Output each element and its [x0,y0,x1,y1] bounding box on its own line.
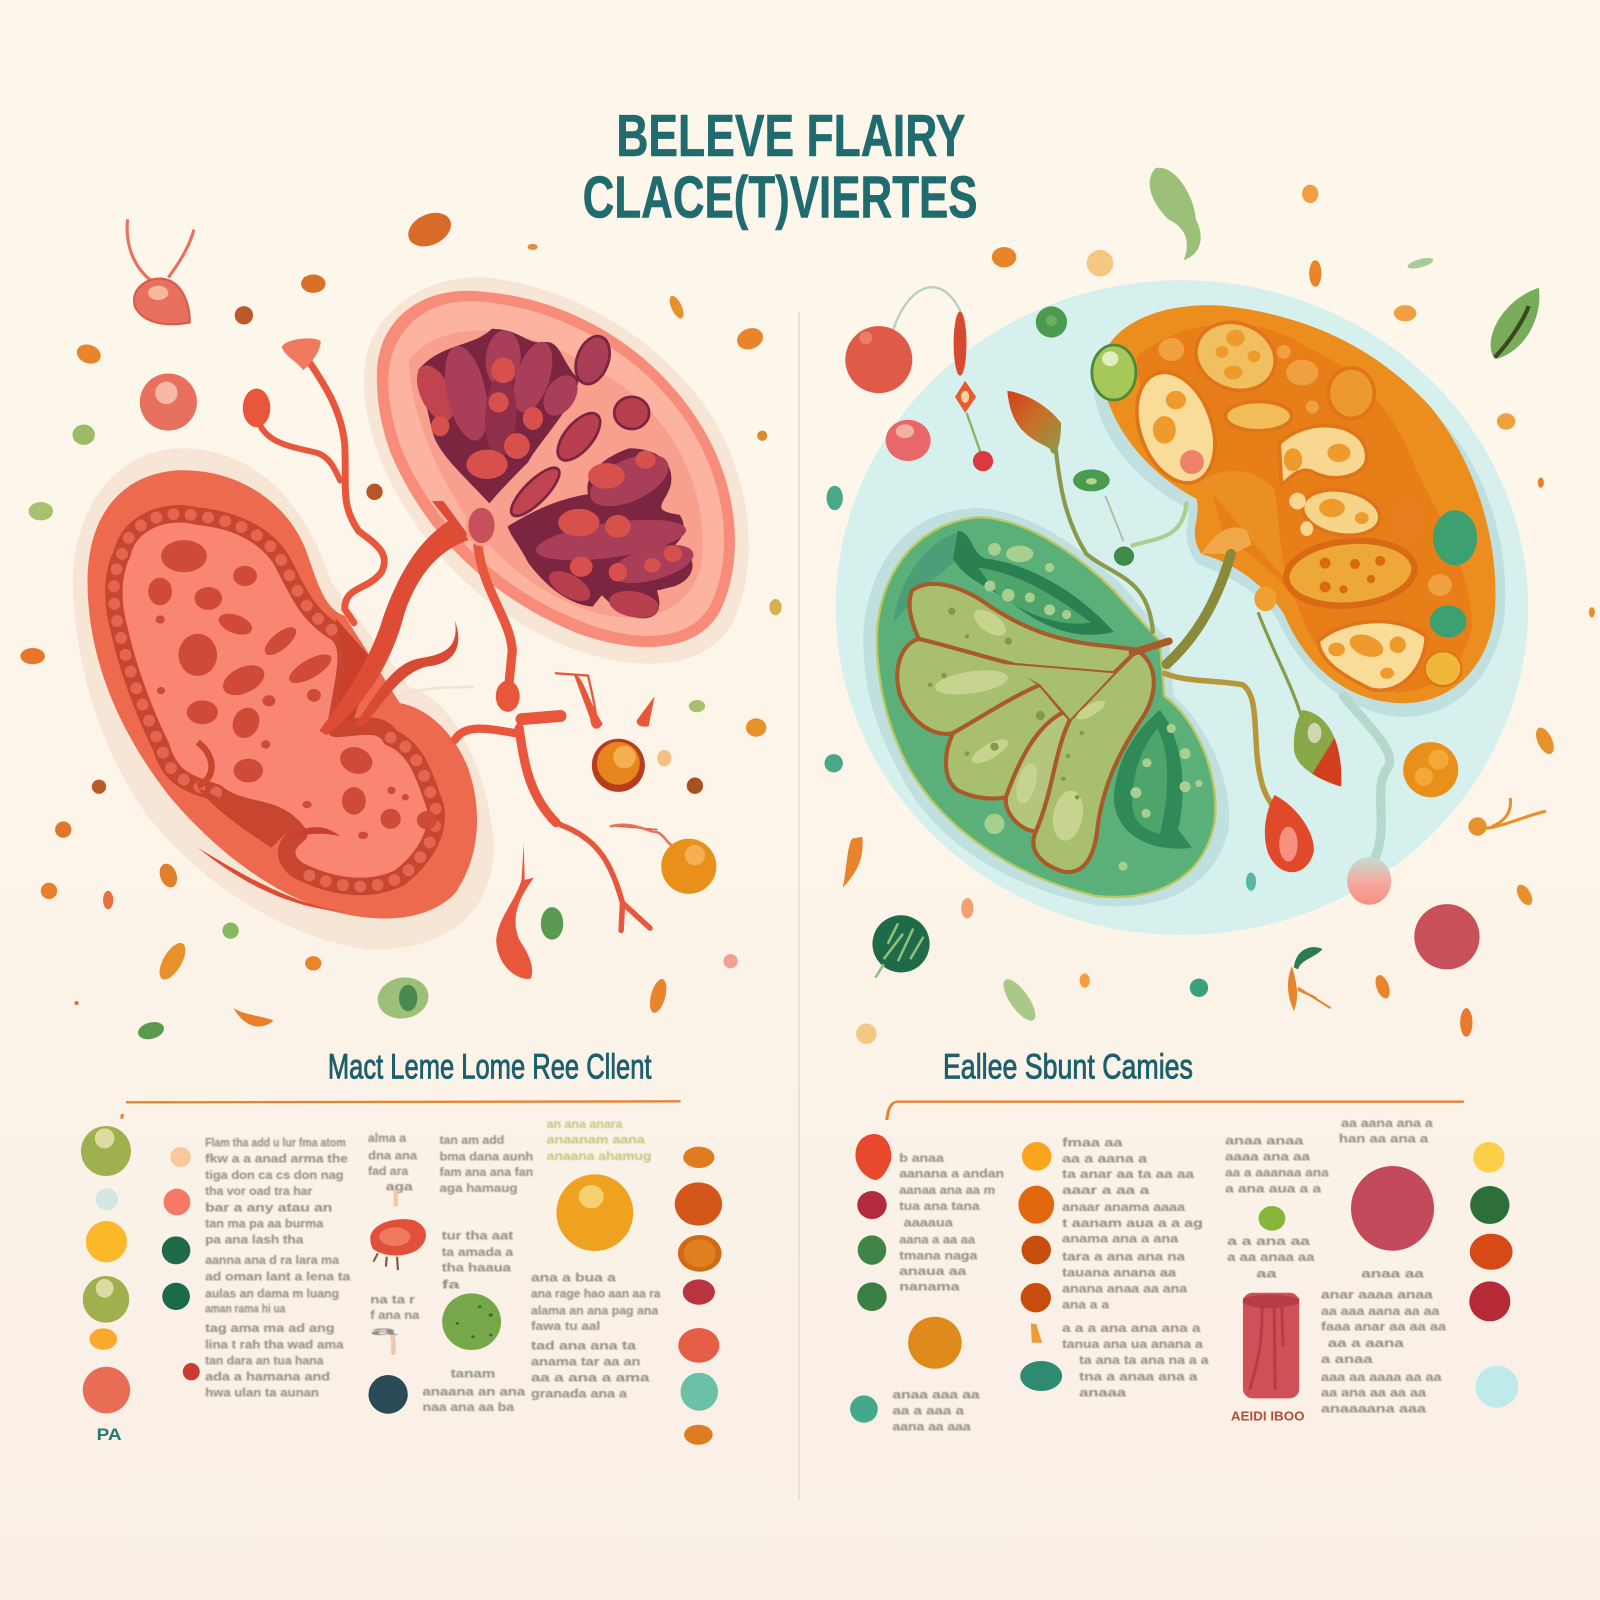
kidney lesions [148,540,437,839]
left green text: anaana ahamug [547,1150,652,1163]
right kidney [377,291,735,647]
lime dot [1259,1206,1285,1231]
left body text: fa [442,1278,460,1292]
left body text: anama tar aa an [531,1356,640,1369]
teal dot [850,1395,878,1423]
coral sphere [140,373,197,431]
carrot sprout [1289,947,1331,1008]
right body text: aana aa aaa [893,1420,971,1434]
right body text: aa aana ana a [1341,1117,1433,1130]
green sphere [442,1293,501,1350]
small drips [393,1192,396,1353]
dark green leaf ball [872,915,930,978]
green spots [984,543,1202,871]
left body text: aa a ana a ama [531,1371,649,1385]
right body text: aaaa ana aa [1225,1151,1310,1164]
right column B dots [1018,1142,1054,1343]
scattered particles: left [20,206,782,1042]
left body text: alama an ana pag ana [531,1304,658,1318]
right body text: aa ana aa aa aa [1321,1387,1426,1400]
left body text: lina t rah tha wad ama [205,1338,344,1352]
left body text: pa ana lash tha [205,1233,303,1247]
left green text [547,1118,652,1163]
left body text: tiga don ca cs don nag [205,1169,343,1182]
navy dot [368,1375,408,1414]
left body text: f ana na [370,1309,419,1322]
right body text: aaa aa aaaa aa aa [1321,1371,1442,1384]
small red organ [370,1219,426,1270]
right body text: ta ana ta ana na a a [1079,1354,1209,1367]
left body text: ana a bua a [531,1272,616,1285]
green and yellow nodules [1092,345,1477,686]
PA label: PA [97,1426,122,1444]
left column dots [81,1126,131,1413]
right body text: tanua ana ua anana a [1062,1338,1203,1351]
right body text: anama ana a ana [1062,1233,1178,1246]
right body text [892,1117,1446,1434]
left body text: dna ana [368,1149,417,1163]
right body text: aa a aana [1328,1337,1404,1350]
right body text: anaaaana aaa [1321,1402,1426,1416]
left body text: naa ana aa ba [422,1401,514,1414]
red ball [1414,904,1480,969]
title: CLACE(T)VIERTES [583,163,978,230]
left body text: anaana an ana [422,1385,525,1399]
left rule [122,1101,681,1119]
organ shadows [863,309,1505,906]
right body text: a ana aua a a [1225,1183,1321,1196]
left body text: ada a hamana and [205,1371,330,1384]
orange sphere [610,825,716,894]
right body text: nanama [899,1280,960,1294]
left heading: Mact Leme Lome Ree Cllent [328,1047,652,1086]
left panel [81,1047,722,1445]
right body text: faaa anar aa aa aa [1321,1321,1446,1334]
right body text: aaaaua [904,1217,953,1230]
left body text: tag ama ma ad ang [205,1322,335,1335]
left body text: tanam [451,1368,495,1381]
right body text: a a ana aa [1227,1235,1310,1248]
illustration: green and orange organs [836,280,1528,935]
left body text: tur tha aat [442,1229,513,1243]
pale blue disc [836,280,1528,935]
right body text: aa a aaa a [893,1405,964,1418]
right body text: anaa aaa aa [893,1389,980,1402]
left body text: aman rama hi ua [205,1303,286,1316]
left body text: tha vor oad tra har [205,1185,313,1198]
left body text: alma a [368,1132,406,1145]
left body text: ana rage hao aan aa ra [531,1288,661,1301]
right body text: anaar anama aaaa [1062,1201,1185,1214]
right body text: anaa aa [1361,1268,1424,1281]
right body text: anaa anaa [1225,1135,1303,1148]
crimson ball [1351,1166,1434,1251]
vessels [255,350,657,930]
right body text: tmana naga [899,1249,977,1263]
left body text: bar a any atau an [205,1202,332,1215]
left body text: Flam tha add u lur fma atom [205,1137,346,1150]
right body text: aa a aaanaa ana [1225,1167,1329,1180]
right column C dots [1469,1142,1518,1408]
right kidney halo [364,277,749,664]
center divider [798,311,800,1500]
left body text: fam ana ana fan [439,1166,533,1179]
left green text: anaanam aana [547,1134,645,1147]
left body text [205,1132,661,1414]
right column dots [675,1147,722,1445]
green organ [877,517,1215,897]
left body text: aanna ana d ra lara ma [205,1254,339,1267]
left body text: tan ma pa aa burma [205,1218,323,1231]
right body text: ana a a [1062,1298,1109,1312]
right body text: anaua aa [899,1265,966,1278]
right body text: fmaa aa [1062,1137,1123,1150]
left green text: an ana anara [547,1118,623,1131]
left body text: aga [386,1180,413,1194]
right body text: aana a aa aa [899,1233,975,1247]
teal blob [1020,1361,1062,1391]
left body text: hwa ulan ta aunan [205,1387,319,1400]
vessel ends [243,338,655,979]
orange textured sphere [908,1317,962,1369]
right body text: tna a anaa ana a [1079,1370,1198,1384]
right body text: t aanam aua a a ag [1062,1217,1203,1230]
red caption: AEIDI IBOO [1231,1410,1305,1424]
scattered particles: right [824,168,1595,1044]
right body text: a aa anaa aa [1227,1251,1314,1264]
right body text: aaar a aa a [1062,1184,1149,1197]
left inner dots [162,1147,200,1380]
right body text: tara a ana ana na [1062,1250,1185,1264]
left body text: na ta r [370,1293,415,1307]
title [583,102,978,230]
right body text: aa aaa aana aa aa [1321,1305,1439,1318]
orange organ [1092,305,1495,703]
right body text: a a a ana ana ana a [1062,1322,1201,1335]
orange berry [592,739,645,792]
right body text: tauana anana aa [1062,1266,1176,1280]
left body text: tad ana ana ta [531,1339,636,1353]
left body text: tan am add [439,1134,504,1147]
left body text: fawa tu aal [531,1320,600,1333]
left kidney halo [73,448,494,950]
right body text: anana anaa aa ana [1062,1282,1187,1296]
illustration: red kidneys [73,277,749,979]
left body text: bma dana aunh [439,1150,533,1164]
right body text: aanaa ana aa m [899,1184,995,1197]
left body text: a [370,1325,397,1338]
left body text: fad ara [368,1165,408,1178]
right body text: ta anar aa ta aa aa [1062,1168,1194,1181]
left body text: ta amada a [442,1246,513,1259]
orange organ cells [1123,312,1426,690]
left body text: ad oman lant a lena ta [205,1271,350,1284]
drops and berries [845,306,1458,905]
right body text: a anaa [1321,1353,1373,1366]
stems [893,287,1390,857]
right body text: anar aaaa anaa [1321,1289,1433,1302]
right panel [850,1047,1518,1434]
right body text: b anaa [899,1152,944,1165]
left body text: granada ana a [531,1387,627,1401]
right rule [887,1102,1464,1120]
right column A dots [855,1134,891,1311]
title: BELEVE FLAIRY [616,102,965,169]
right body text: han aa ana a [1339,1133,1428,1146]
golden sphere [556,1174,633,1251]
right body text: aa a aana a [1062,1152,1147,1166]
left kidney [88,470,477,919]
top-left bud with antennae [127,219,194,324]
olive leaf lobes [897,584,1154,872]
right heading: Eallee Sbunt Camies [943,1047,1193,1086]
right body text: anaaa [1079,1386,1126,1400]
left body text: fkw a a anad arma the [205,1153,348,1166]
left body text: tan dara an tua hana [205,1354,323,1368]
left body text: aulas an dama m luang [205,1287,339,1301]
left body text: tha haaua [442,1262,511,1275]
red organ block [1243,1293,1299,1398]
right body text: aa [1256,1268,1277,1281]
renal hilum [467,506,496,545]
right body text: aanana a andan [899,1168,1004,1181]
medulla lobes [409,329,697,621]
right body text: tua ana tana [899,1200,980,1213]
left body text: aga hamaug [439,1182,518,1195]
